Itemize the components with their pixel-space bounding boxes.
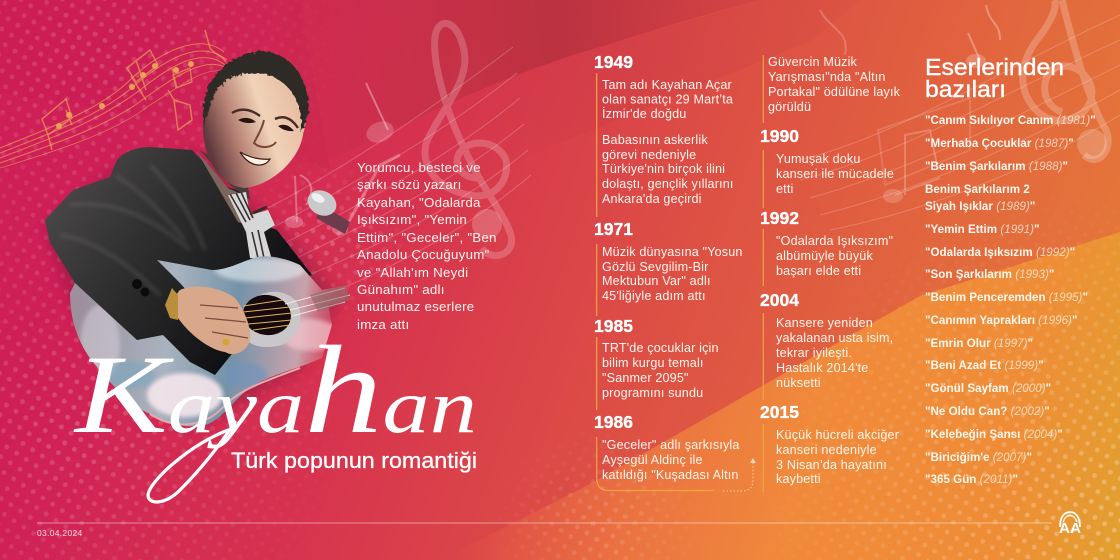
entry 1949: İzmir'de doğdu <box>602 107 686 121</box>
entry 2004: nüksetti <box>776 376 821 390</box>
entry 1986 continued: görüldü <box>768 100 811 114</box>
works list: "Odalarda Işıksızım (1992)" <box>925 246 1075 259</box>
guitar <box>70 256 350 426</box>
works list: "Son Şarkılarım (1993)" <box>925 268 1054 281</box>
entry 2015: 2015 <box>760 402 799 422</box>
timeline column 1 <box>594 52 756 491</box>
entry 1985 <box>594 316 719 410</box>
intro text: Yorumcu, besteci ve <box>357 160 481 175</box>
entry 1985: "Sanmer 2095" <box>602 371 689 385</box>
works heading: Eserlerinden <box>925 54 1064 80</box>
name in script style: Kayahan <box>73 321 477 460</box>
entry 1971: Müzik dünyasına "Yosun <box>602 245 743 259</box>
intro text: Anadolu Çocuğuyum" <box>357 247 490 262</box>
works list: Benim Şarkılarım 2 <box>925 183 1030 196</box>
entry 1949: dolaştı, gençlik yıllarını <box>602 177 734 191</box>
entry 1949: Ankara'da geçirdi <box>602 192 702 206</box>
works list: "Canımın Yaprakları (1996)" <box>925 314 1077 327</box>
entry 2004: yakalanan usta isim, <box>776 331 893 345</box>
works list: Siyah Işıklar (1989)" <box>925 200 1035 213</box>
entry 1992 <box>760 208 893 286</box>
entry 1971: 1971 <box>594 219 633 239</box>
works list <box>925 114 1096 486</box>
entry 1971: Gözlü Sevgilim-Bir <box>602 260 708 274</box>
entry 2015: kanseri nedeniyle <box>776 443 877 457</box>
entry 1985: bilim kurgu temalı <box>602 356 704 370</box>
music staff with treble clef, top right <box>800 0 1120 230</box>
intro text: imza attı <box>357 317 409 332</box>
entry 1949: Tam adı Kayahan Açar <box>602 78 732 92</box>
works list: "Gönül Sayfam (2000)" <box>925 382 1051 395</box>
neck and shirt <box>196 150 275 260</box>
works list: "Canım Sıkılıyor Canım (1981)" <box>925 114 1096 127</box>
icon: AA agency logo: AA <box>1059 520 1081 537</box>
entry 1990: Yumuşak doku <box>776 152 861 166</box>
entry 1986: Ayşegül Aldinç ile <box>602 453 703 467</box>
works list: "Ne Oldu Can? (2002)" <box>925 405 1050 418</box>
entry 2015: Küçük hücreli akciğer <box>776 428 899 442</box>
intro text <box>357 160 497 332</box>
entry 2015 <box>760 402 899 492</box>
entry 2015: 3 Nisan’da hayatını <box>776 458 887 472</box>
intro text: ve "Allah'ım Neydi <box>357 265 468 280</box>
entry 1986 continued <box>763 55 901 123</box>
entry 1985: programını sundu <box>602 386 703 400</box>
entry 1992: 1992 <box>760 208 799 228</box>
photo shadow <box>45 150 340 430</box>
entry 1985: 1985 <box>594 316 633 336</box>
footer rule and date: 03.04.2024 <box>37 528 83 538</box>
intro text: Ettim", "Geceler", "Ben <box>357 230 497 245</box>
entry 1986 <box>594 412 740 490</box>
works list: "Yemin Ettim (1991)" <box>925 223 1040 236</box>
gold music staff, top left <box>0 30 227 168</box>
entry 1949: Babasının askerlik <box>602 133 708 147</box>
intro text: Kayahan, "Odalarda <box>357 195 481 210</box>
entry 2004: 2004 <box>760 290 799 310</box>
timeline column 2 <box>760 55 901 492</box>
entry 1949: Türkiye'nin birçok ilini <box>602 162 725 176</box>
entry 1971: 45'liğiyle adım attı <box>602 289 706 303</box>
entry 1985: TRT'de çocuklar için <box>602 341 719 355</box>
entry 1992: "Odalarda Işıksızım" <box>776 234 893 248</box>
entry 1986: katıldığı "Kuşadası Altın <box>602 468 739 482</box>
entry 1986: "Geceler" adlı şarkısıyla <box>602 438 740 452</box>
music staff with treble clef, centre <box>268 23 531 305</box>
arrow: continues in next column <box>723 458 756 491</box>
entry 1992: albümüyle büyük <box>776 249 873 263</box>
entry 1990: etti <box>776 182 793 196</box>
entry 1986 continued: Yarışması"nda "Altın <box>768 70 886 84</box>
intro text: unutulmaz eserlere <box>357 299 474 314</box>
entry 1949 <box>594 52 734 217</box>
entry 2004 <box>760 290 893 400</box>
intro text: Işıksızım", "Yemin <box>357 212 467 227</box>
works list: "365 Gün (2011)" <box>925 473 1018 486</box>
entry 1986 continued: Portakal" ödülüne layık <box>768 85 901 99</box>
entry 1986: 1986 <box>594 412 633 432</box>
works heading: bazıları <box>925 76 1006 102</box>
entry 1990 <box>760 126 894 208</box>
works list: "Benim Şarkılarım (1988)" <box>925 160 1068 173</box>
works list: "Benim Penceremden (1995)" <box>925 291 1088 304</box>
entry 2004: tekrar iyileşti. <box>776 346 852 360</box>
jacket sleeve <box>45 158 235 375</box>
entry 1971 <box>594 219 743 316</box>
jacket body <box>100 147 312 300</box>
works heading <box>925 54 1064 102</box>
entry 1986 continued: Güvercin Müzik <box>768 55 858 69</box>
subtitle: Türk popunun romantiği <box>231 448 477 473</box>
photo: Kayahan playing guitar <box>45 51 350 430</box>
entry 1949: görevi nedeniyle <box>602 148 696 162</box>
intro text: şarkı sözü yazarı <box>357 177 462 192</box>
works list: "Beni Azad Et (1999)" <box>925 359 1044 372</box>
entry 1949: 1949 <box>594 52 633 72</box>
entry 2015: kaybetti <box>776 472 821 486</box>
entry 1990: 1990 <box>760 126 799 146</box>
entry 2004: Kansere yeniden <box>776 316 873 330</box>
entry 1949: olan sanatçı 29 Mart’ta <box>602 92 733 106</box>
head <box>203 51 308 188</box>
entry 1971: Mektubun Var" adlı <box>602 274 711 288</box>
entry 1992: başarı elde etti <box>776 264 861 278</box>
entry 2004: Hastalık 2014'te <box>776 361 868 375</box>
works list: "Merhaba Çocuklar (1987)" <box>925 137 1074 150</box>
works list: "Kelebeğin Şansı (2004)" <box>925 428 1063 441</box>
entry 1990: kanseri ile mücadele <box>776 167 894 181</box>
microphone <box>303 185 350 234</box>
intro text: Günahım" adlı <box>357 282 445 297</box>
works list: "Emrin Olur (1997)" <box>925 337 1033 350</box>
icon: AA agency logo <box>1059 512 1081 537</box>
works list: "Biriciğim'e (2007)" <box>925 451 1032 464</box>
hand <box>165 287 250 354</box>
